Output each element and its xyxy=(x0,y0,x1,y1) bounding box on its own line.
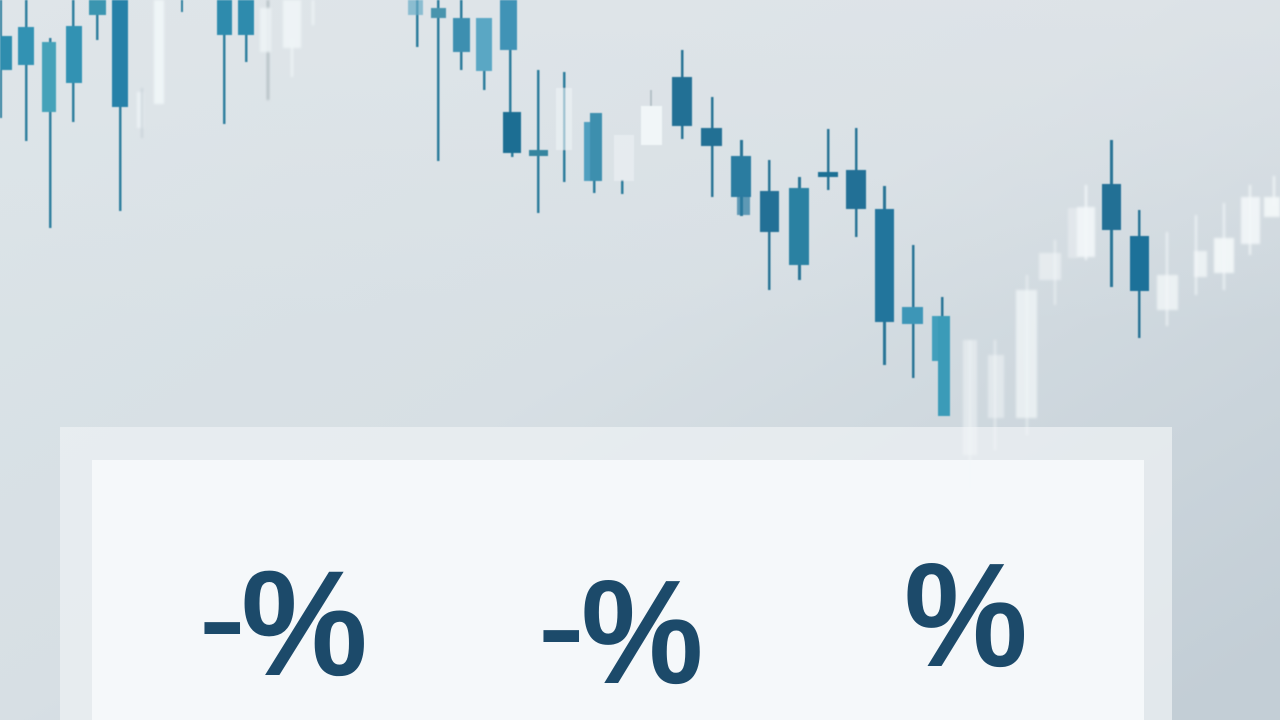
percent change 1: - xyxy=(199,564,246,675)
candlestick chart xyxy=(0,0,1280,490)
percent change 2: - xyxy=(538,572,585,683)
left candles xyxy=(0,0,254,228)
right dark candles xyxy=(1102,140,1149,338)
percent value 3: % xyxy=(904,533,1028,698)
rising white candles xyxy=(963,176,1280,490)
middle candles xyxy=(408,0,634,213)
outer panel xyxy=(60,427,1172,720)
percent change 2: % xyxy=(581,550,703,715)
percent change 1: % xyxy=(241,541,368,708)
inner panel xyxy=(92,460,1144,720)
descending candles xyxy=(641,50,950,416)
white left candles xyxy=(137,0,314,138)
